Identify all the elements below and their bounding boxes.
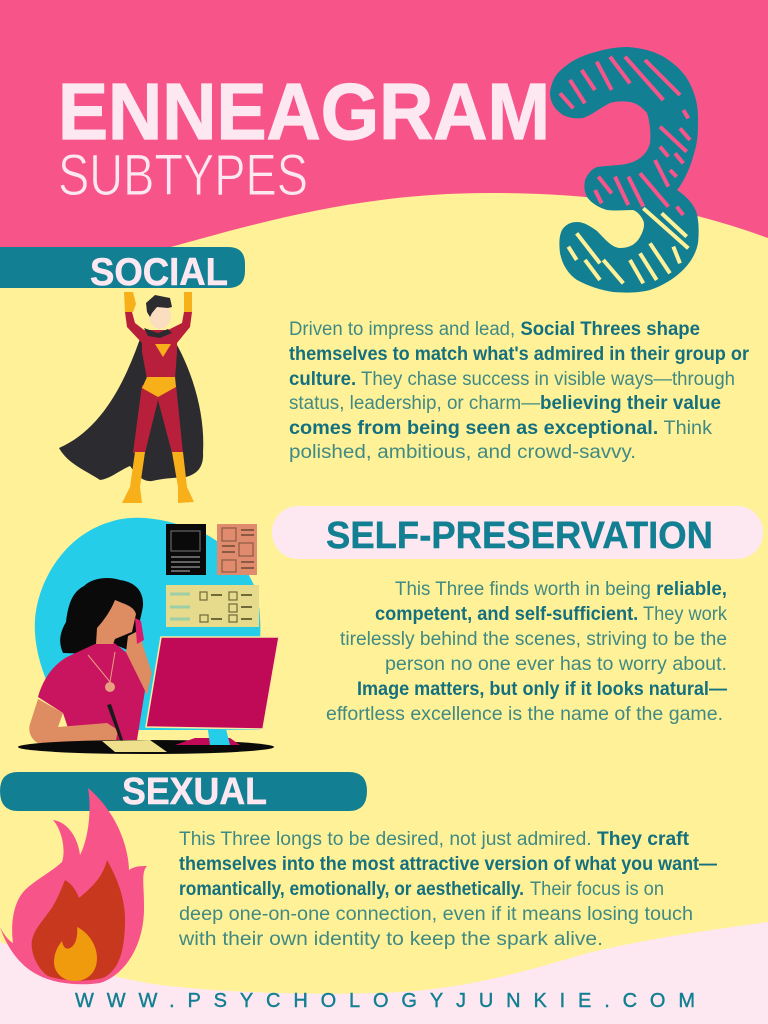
- pen: [107, 704, 124, 743]
- legs: [133, 385, 183, 453]
- heading pill: SELF-PRESERVATION: [272, 506, 763, 559]
- social description text: themselves to match what's admired in their group or: [289, 344, 750, 365]
- social description text: [289, 319, 750, 463]
- footer website: WWW.PSYCHOLOGYJUNKIE.COM: [75, 990, 695, 1012]
- document: black: [166, 524, 206, 575]
- sexual description text: Their focus is on: [530, 879, 664, 900]
- blue backdrop: [35, 518, 260, 730]
- outer flame: [0, 788, 147, 984]
- torso: [38, 642, 147, 740]
- torso and arms: [125, 312, 192, 379]
- social description text: status, leadership, or charm—believing their value: [289, 393, 721, 414]
- self-preservation description text: [326, 579, 727, 725]
- light pink footer wave: [0, 922, 768, 1024]
- social description text: polished, ambitious, and crowd-savvy.: [289, 442, 636, 463]
- heading pill: SEXUAL: [0, 771, 367, 813]
- heading pill: SELF-PRESERVATION: SELF-PRESERVATION: [326, 515, 713, 557]
- inner flame: [54, 927, 97, 981]
- illustration: superhero: [59, 292, 203, 503]
- trunks: [142, 377, 176, 397]
- middle flame: [32, 860, 125, 981]
- title: [58, 67, 550, 208]
- social description text: culture. They chase success in visible ways—through: [289, 369, 735, 390]
- phone arm and hand: [126, 630, 152, 695]
- cape: [59, 330, 203, 481]
- boots: [122, 452, 194, 503]
- collar: [144, 328, 172, 338]
- pink header wave: [0, 0, 768, 274]
- phone: [135, 618, 144, 644]
- sexual description text: [178, 829, 717, 950]
- self-preservation description text: effortless excellence is the name of the game.: [326, 704, 723, 725]
- illustration: woman at desk: [18, 518, 279, 754]
- title: ENNEAGRAM: ENNEAGRAM: [58, 67, 550, 156]
- sexual description text: themselves into the most attractive version of what you want—: [179, 854, 717, 875]
- sexual description text: with their own identity to keep the spark alive.: [178, 929, 603, 950]
- self-preservation description text: person no one ever has to worry about.: [385, 654, 727, 675]
- self-preservation description text: Image matters, but only if it looks natural—: [357, 679, 727, 700]
- document: checklist: [166, 585, 259, 627]
- icon: flame: [0, 788, 147, 984]
- emblem: [155, 344, 171, 357]
- sketch hatching: yellow: [568, 208, 688, 283]
- social description text: comes from being seen as exceptional. Think: [289, 418, 713, 439]
- monitor base: [175, 738, 240, 745]
- monitor stand: [205, 709, 230, 745]
- heading pill: SOCIAL: [0, 247, 245, 294]
- document: salmon: [217, 524, 257, 575]
- social description text: Driven to impress and lead, Social Threes shape: [289, 319, 700, 340]
- face: [149, 301, 171, 329]
- paper: [102, 740, 167, 752]
- document details: [170, 528, 254, 622]
- sexual description text: This Three longs to be desired, not just admired. They craft: [179, 829, 690, 850]
- icon: sketched number 3: [550, 47, 699, 293]
- subtitle: SUBTYPES: SUBTYPES: [58, 143, 308, 208]
- self-preservation description text: tirelessly behind the scenes, striving to be the: [340, 629, 727, 650]
- self-preservation description text: This Three finds worth in being reliable,: [395, 579, 727, 600]
- monitor: [146, 637, 279, 729]
- hair: [146, 295, 172, 317]
- heading pill: SOCIAL: SOCIAL: [90, 251, 228, 294]
- self-preservation description text: competent, and self-sufficient. They work: [375, 604, 727, 625]
- heading pill: SEXUAL: SEXUAL: [122, 771, 267, 813]
- left arm: [29, 699, 118, 744]
- face and neck: [96, 600, 136, 644]
- sexual description text: deep one-on-one connection, even if it means losing touch: [179, 904, 693, 925]
- necklace: [88, 652, 115, 682]
- hair: [60, 578, 143, 655]
- hands: [124, 292, 192, 312]
- sketch hatching: pink: [560, 57, 690, 215]
- desk: [18, 740, 274, 754]
- sexual description text: romantically, emotionally, or aesthetically.: [179, 879, 524, 900]
